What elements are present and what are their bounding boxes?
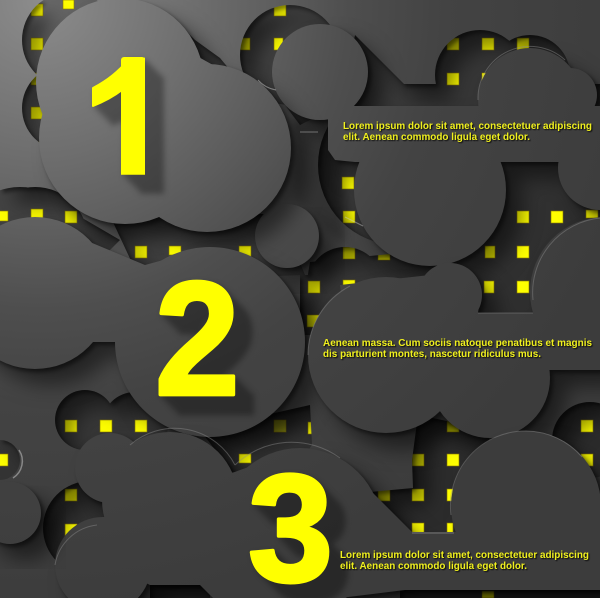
small round disc bbox=[255, 204, 319, 268]
disc cluster behind number 1 bbox=[36, 0, 291, 232]
text panel 1 shape bbox=[272, 24, 600, 266]
number 1 bbox=[92, 57, 166, 196]
disc cluster behind number 3 bbox=[55, 431, 600, 598]
text block 1 bbox=[343, 120, 592, 143]
text block 2 bbox=[323, 337, 592, 360]
text panel 2 shape bbox=[308, 217, 600, 438]
disc cluster behind number 2 bbox=[0, 217, 305, 437]
text block 3: elit. Aenean commodo ligula eget dolor. bbox=[340, 560, 527, 572]
small disc bottom left bbox=[0, 482, 41, 544]
text block 2: Aenean massa. Cum sociis natoque penatibus et magnis bbox=[323, 337, 592, 349]
text block 1: elit. Aenean commodo ligula eget dolor. bbox=[343, 131, 530, 143]
text block 3 bbox=[340, 549, 589, 572]
number 2: 2 bbox=[155, 249, 240, 430]
text block 2: dis parturient montes, nascetur ridiculus mus. bbox=[323, 348, 541, 360]
text block 1: Lorem ipsum dolor sit amet, consectetuer adipiscing bbox=[343, 120, 592, 132]
text block 3: Lorem ipsum dolor sit amet, consectetuer adipiscing bbox=[340, 549, 589, 561]
number 1: 1 bbox=[86, 22, 179, 210]
